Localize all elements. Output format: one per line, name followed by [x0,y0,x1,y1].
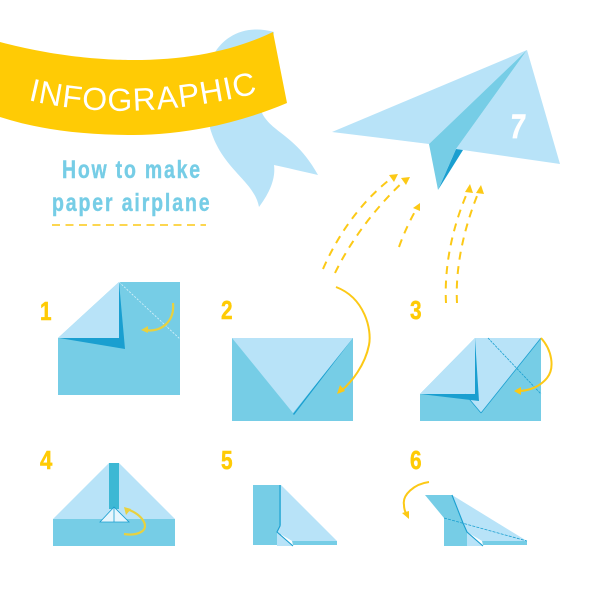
step 6 number: 6 [410,446,422,475]
ribbon tail [210,29,318,207]
subtitle dashed rule [52,224,206,226]
finished paper airplane, step 7 [332,50,560,190]
step 5 number: 5 [221,446,233,475]
number 7: 7 [508,107,527,146]
banner title: INFOGRAPHIC [30,73,256,112]
dashed flight arrows [323,174,484,303]
step 2 diagram [232,287,370,421]
step 1 number: 1 [40,297,52,326]
subtitle: paper airplane [52,189,210,217]
step 4 number: 4 [40,446,53,475]
subtitle [52,156,210,217]
arrow [124,507,145,535]
ribbon banner [0,32,287,135]
step 5 diagram [253,485,337,546]
step 4 diagram [53,463,175,546]
step 1 diagram [58,282,180,395]
step 6 diagram [402,482,527,546]
arrow [141,303,173,333]
arrow [514,338,552,395]
step 2 number: 2 [221,296,233,325]
step 3 number: 3 [410,296,422,325]
step 3 diagram [420,338,552,421]
subtitle: How to make [62,156,200,184]
arrow [402,482,429,519]
arrow [336,287,370,394]
